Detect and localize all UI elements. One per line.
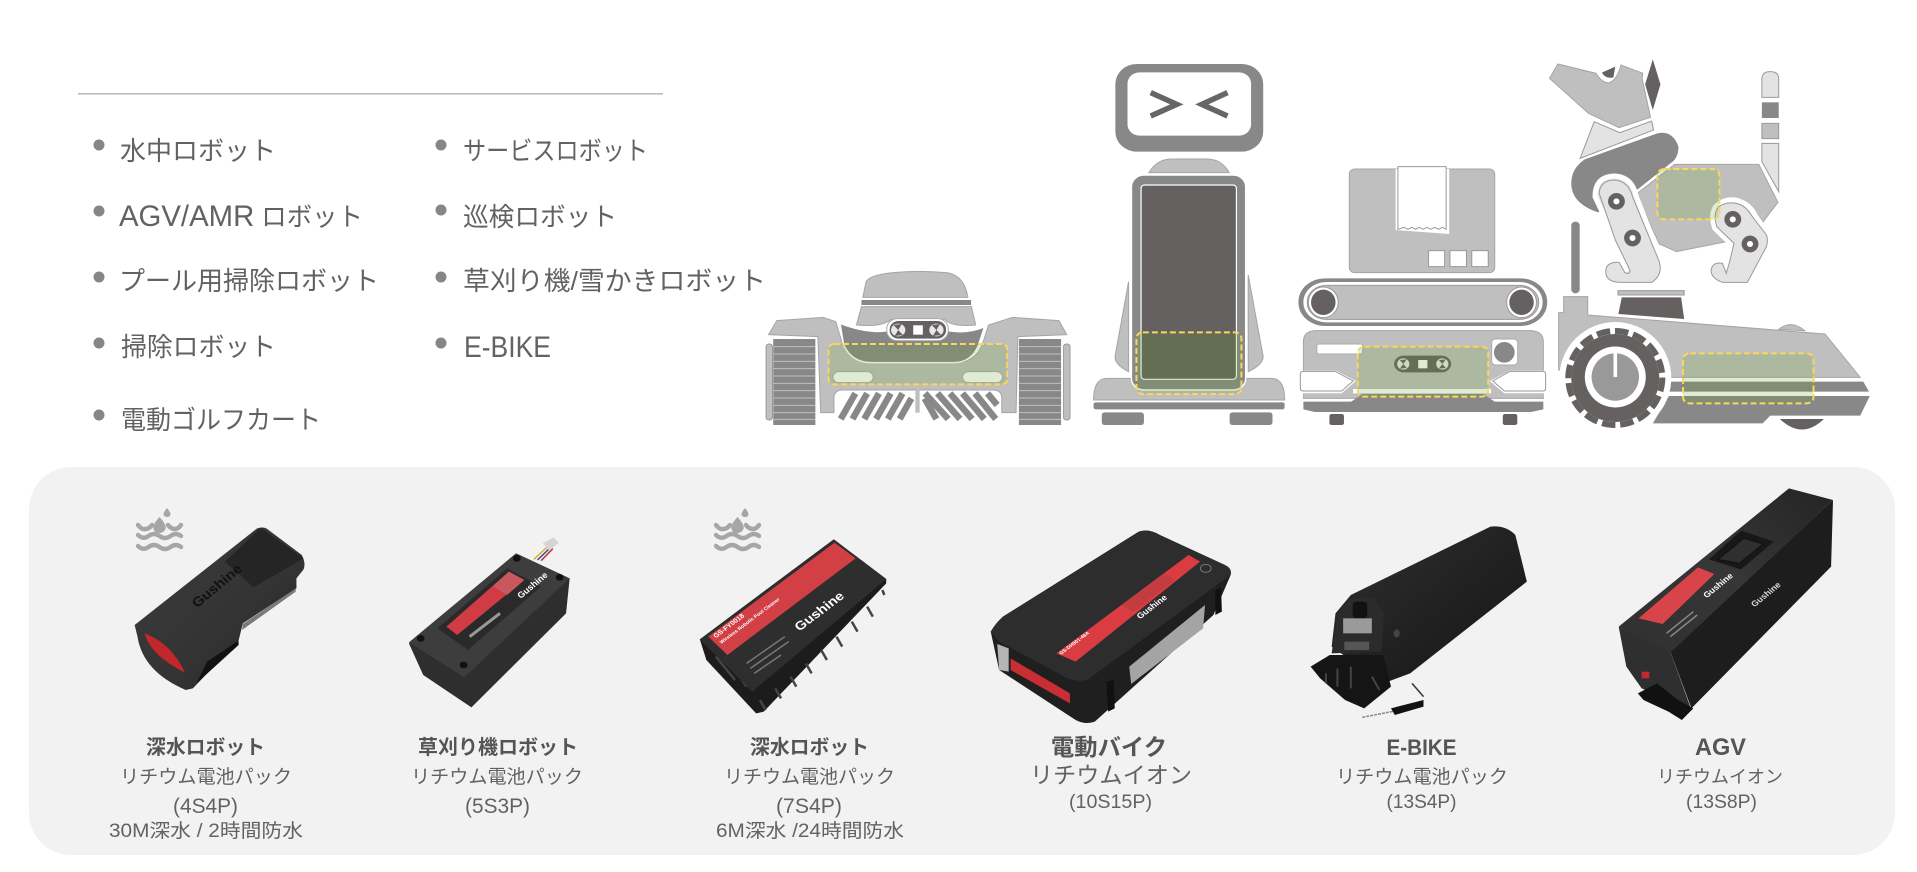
robot: tracked mower front view: [766, 271, 1070, 425]
battery: electric bike pack: [991, 531, 1231, 723]
battery: AGV pack: [1619, 488, 1833, 720]
label: underwater robot 4S4P: (4S4P): [173, 795, 238, 818]
battery: e-bike frame pack: [1311, 526, 1527, 717]
battery: AGV pack: Gushine: [1701, 571, 1735, 600]
list item: pool cleaning robot: プール用掃除ロボット: [119, 266, 379, 296]
battery: mower robot box: [409, 537, 570, 707]
label: underwater robot 4S4P: 30M深水 / 2時間防水: [109, 820, 303, 842]
icon: AGV wheel: [1559, 322, 1671, 434]
list item: AGV/AMR robot: AGV/AMR ロボット: [119, 200, 363, 233]
battery: pool robot ribbed pack: GS-FY0018: [712, 613, 746, 640]
label: e-bike 13S4P: リチウム電池パック: [1336, 766, 1508, 788]
label: underwater robot 4S4P: [109, 736, 303, 842]
battery: pool robot ribbed pack: Gushine: [791, 589, 847, 634]
label: electric bike 10S15P: 電動バイク: [1051, 734, 1167, 760]
label: e-bike 13S4P: [1336, 735, 1508, 813]
label: underwater robot 7S4P: [716, 736, 904, 842]
list item: electric golf cart: 電動ゴルフカート: [121, 405, 321, 435]
divider line: [78, 93, 663, 95]
label: AGV 13S8P: AGV: [1695, 734, 1746, 761]
label: mower robot 5S3P: [411, 736, 583, 818]
label: underwater robot 7S4P: 深水ロボット: [750, 736, 869, 759]
list item: e-bike: E-BIKE: [464, 331, 551, 364]
battery: pool robot ribbed pack: [700, 539, 886, 713]
label: mower robot 5S3P: リチウム電池パック: [411, 766, 583, 788]
label: AGV 13S8P: [1657, 734, 1783, 813]
label: electric bike 10S15P: リチウムイオン: [1030, 762, 1192, 788]
battery: electric bike pack: GS-DH901-48A: [1058, 630, 1091, 656]
label: underwater robot 7S4P: リチウム電池パック: [724, 766, 895, 788]
label: electric bike 10S15P: (10S15P): [1069, 792, 1152, 813]
list item: e-bike: [436, 331, 551, 364]
battery: underwater robot cylinder: [135, 527, 304, 690]
label: AGV 13S8P: リチウムイオン: [1657, 767, 1783, 787]
label: e-bike 13S4P: E-BIKE: [1386, 735, 1456, 760]
label: mower robot 5S3P: 草刈り機ロボット: [418, 736, 578, 759]
robot: AGV side view: [1559, 222, 1870, 434]
battery: mower robot box: Gushine: [515, 570, 550, 600]
list item: underwater robot: 水中ロボット: [120, 136, 276, 166]
robot: delivery robot on conveyor: [1298, 167, 1547, 425]
label: electric bike 10S15P: [1030, 734, 1192, 813]
icon: waterproof 1: [138, 508, 181, 549]
battery: electric bike pack: Gushine: [1134, 593, 1169, 621]
label: mower robot 5S3P: (5S3P): [465, 795, 530, 818]
battery: pool robot ribbed pack: Wireless Robotic Pool Cleaner: [719, 597, 782, 645]
list item: cleaning robot: 掃除ロボット: [121, 332, 276, 362]
icon: waterproof 2: [716, 508, 759, 549]
label: e-bike 13S4P: (13S4P): [1386, 792, 1456, 813]
robot: dog robot: [1549, 59, 1779, 285]
list item: inspection robot: 巡検ロボット: [463, 202, 617, 232]
label: underwater robot 4S4P: リチウム電池パック: [120, 766, 292, 788]
list item: service robot: サービスロボット: [463, 136, 648, 166]
label: underwater robot 7S4P: 6M深水 /24時間防水: [716, 820, 904, 842]
label: underwater robot 4S4P: 深水ロボット: [146, 736, 265, 759]
panel: battery lineup: [29, 467, 1895, 855]
battery: AGV pack: Gushine: [1749, 580, 1783, 609]
label: AGV 13S8P: (13S8P): [1686, 792, 1757, 813]
battery: underwater robot cylinder: Gushine: [189, 562, 246, 611]
list item: mower and snow robot: 草刈り機/雪かきロボット: [463, 266, 766, 296]
application list: [94, 136, 766, 435]
robot: service robot with face screen: [1094, 64, 1285, 425]
label: underwater robot 7S4P: (7S4P): [776, 795, 842, 818]
